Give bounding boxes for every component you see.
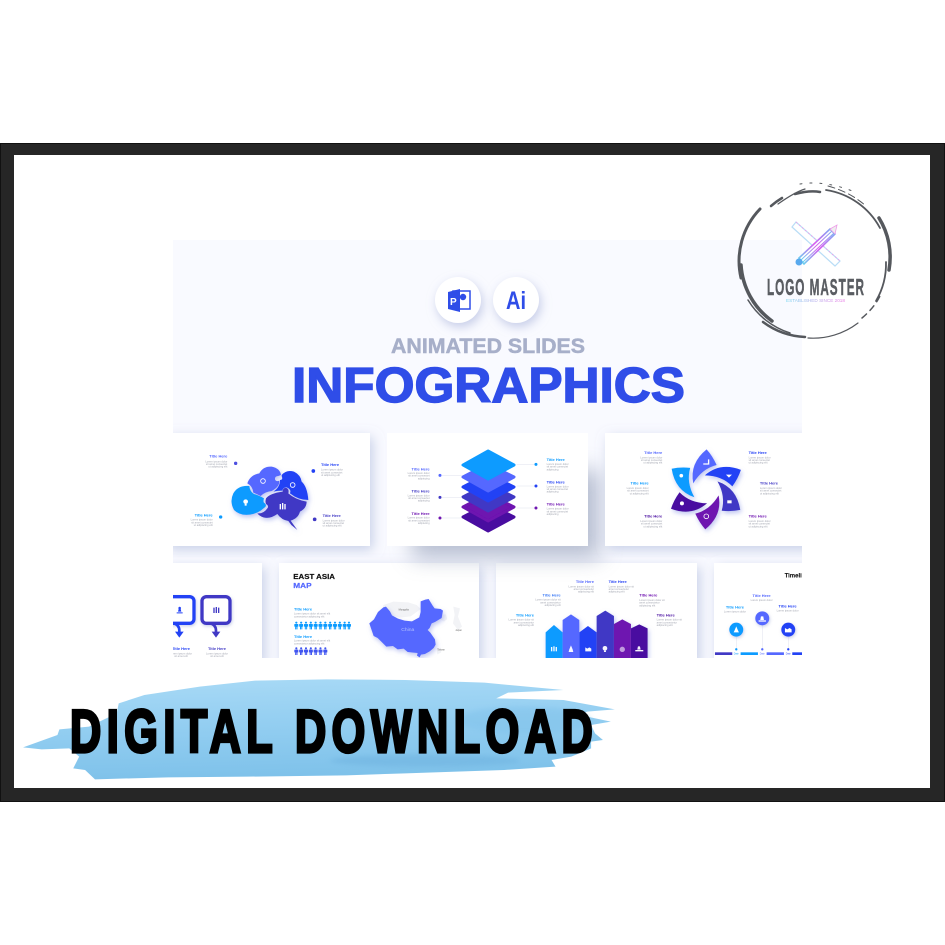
card: flower diagram: Title Here <box>631 481 649 486</box>
card: flower diagram: ut adipiscing elit <box>643 461 663 465</box>
icon: PowerPoint badge <box>435 277 481 323</box>
card: flower diagram: sit amet consectet <box>627 489 649 493</box>
card: East Asia map: Title Here <box>294 634 313 639</box>
card: flower diagram: ut adipiscing elit <box>630 491 649 495</box>
card: arrow bar chart: Lorem ipsum dolor sit <box>569 584 594 588</box>
card: arrow bar chart: Lorem ipsum dolor sit <box>657 618 682 622</box>
card: arrow bar chart: Title Here <box>657 612 675 617</box>
card: brain puzzle: Title Here <box>209 454 228 459</box>
card: flower diagram: Title Here <box>760 481 779 486</box>
slide preview panel <box>173 274 802 658</box>
card: arrow bar chart: amet consectetur <box>657 620 677 624</box>
card: layer stack: Lorem ipsum dolor <box>408 516 430 520</box>
card: timeline: Title Here <box>753 593 771 598</box>
card: brain puzzle: Lorem ipsum dolor <box>321 468 343 472</box>
logo tagline: ESTABLISHED SINCE 2018 <box>786 298 846 303</box>
card: arrow bar chart: amet consectetur <box>514 620 534 624</box>
card: flower diagram: sit amet consectet <box>641 458 663 462</box>
icon: Illustrator badge <box>493 277 539 323</box>
card: timeline: Lorem ipsum dolor <box>751 598 773 602</box>
card: arrow bar chart: amet consectetur <box>609 587 629 591</box>
card: flower diagram: ut adipiscing elit <box>749 461 768 465</box>
card: timeline: Date <box>734 653 739 656</box>
card: arrow bar chart: adipiscing elit <box>639 603 655 607</box>
card: layer stack: Title Here <box>547 457 565 462</box>
card: timeline: Date <box>786 653 791 656</box>
card: speech boxes <box>160 563 262 663</box>
card: East Asia map: Lorem ipsum dolor sit amet elit <box>294 611 330 615</box>
card: layer stack: Title Here <box>547 479 565 484</box>
card: East Asia map: EAST ASIA <box>293 572 336 581</box>
card: speech boxes: Lorem ipsum dolor <box>206 651 228 655</box>
card: arrow bar chart: adipiscing elit <box>657 623 673 627</box>
card: layer stack: sit amet consectet <box>408 474 430 478</box>
logo badge <box>739 183 890 338</box>
card: brain puzzle: sit amet consectet <box>323 521 344 525</box>
logo ring <box>739 183 890 338</box>
card: layer stack: adipiscing <box>418 521 430 525</box>
card: brain puzzle: Title Here <box>195 512 213 517</box>
shadow under stack card <box>412 470 600 558</box>
card: arrow bar chart: Lorem ipsum dolor sit <box>509 618 534 622</box>
card: layer stack: adipiscing <box>547 490 559 494</box>
card: arrow bar chart: Title Here <box>609 579 627 584</box>
card: brain puzzle: sit amet consectet <box>206 462 228 466</box>
card: brain puzzle: ut adipiscing elit <box>321 473 340 477</box>
card: arrow bar chart: Lorem ipsum dolor sit <box>609 584 634 588</box>
map: neighbours <box>383 602 462 654</box>
card: speech boxes: Title Here <box>172 646 191 651</box>
people row: blue <box>294 622 351 629</box>
card: arrow bar chart: adipiscing elit <box>518 623 534 627</box>
subtitle: ANIMATED SLIDES <box>391 335 585 358</box>
card: brain puzzle: Lorem ipsum dolor <box>191 518 213 522</box>
card: arrow bar chart: adipiscing elit <box>609 590 625 594</box>
card: flower diagram: ut adipiscing elit <box>749 524 768 528</box>
card: brain puzzle: sit amet consectet <box>321 470 343 474</box>
logo icon: ruler and pencil <box>792 222 840 266</box>
brain lobe: light blue <box>231 486 266 515</box>
card: layer stack: Lorem ipsum dolor <box>547 507 569 511</box>
card: flower diagram: Title Here <box>644 514 663 519</box>
card: speech boxes: sit amet elit <box>210 654 224 658</box>
card: flower diagram: ut adipiscing elit <box>643 524 663 528</box>
card: speech boxes: Title Here <box>208 646 227 651</box>
card: timeline: Date <box>760 653 765 656</box>
watercolor brush <box>23 679 615 779</box>
card: flower diagram: Lorem ipsum dolor <box>749 519 771 523</box>
card: East Asia map: Mongolia <box>399 608 409 611</box>
card: flower diagram: Title Here <box>749 450 767 455</box>
card: layer stack: adipiscing <box>547 512 559 516</box>
card: arrow bar chart: amet consectetur <box>540 600 561 604</box>
card: flower diagram: sit amet consectet <box>749 458 770 462</box>
card: timeline: Title Here <box>726 605 745 610</box>
brain lobe: blue <box>273 471 308 500</box>
card: brain puzzle <box>165 433 370 546</box>
row 2 cards <box>160 563 824 663</box>
card: arrow bar chart: Title Here <box>543 592 561 597</box>
card: flower diagram: Lorem ipsum dolor <box>640 455 662 459</box>
card: flower diagram: Lorem ipsum dolor <box>640 519 662 523</box>
flower petals <box>665 449 747 529</box>
row 1 cards <box>165 433 825 546</box>
card: layer stack: Lorem ipsum dolor <box>408 471 430 475</box>
picture frame <box>0 143 945 802</box>
card: brain puzzle: ut adipiscing elit <box>323 524 342 528</box>
card: arrow bar chart: amet consectetur <box>639 601 660 605</box>
card: layer stack: Lorem ipsum dolor <box>408 493 430 497</box>
logo wordmark: LOGO MASTER <box>767 273 864 300</box>
card: brain puzzle: ut adipiscing elit <box>208 465 228 469</box>
card: East Asia map: Title Here <box>294 607 313 612</box>
card: speech boxes: sit amet elit <box>174 654 188 658</box>
chart bars <box>546 611 648 658</box>
card: layer stack: Title Here <box>412 489 430 494</box>
card: flower diagram: Title Here <box>644 450 663 455</box>
card: arrow bar chart: Lorem ipsum dolor sit <box>535 598 561 602</box>
card: flower diagram: sit amet consectet <box>641 522 663 526</box>
card: arrow bar chart: adipiscing elit <box>578 590 594 594</box>
banner text: DIGITAL DOWNLOAD <box>70 699 593 766</box>
card: arrow bar chart: Title Here <box>576 579 595 584</box>
card: arrow bar chart: adipiscing elit <box>545 603 561 607</box>
card: brain puzzle: Lorem ipsum dolor <box>205 459 227 463</box>
card: arrow bar chart: Title Here <box>516 612 535 617</box>
card: timeline: Title Here <box>779 604 797 609</box>
card: brain puzzle: Title Here <box>323 513 342 518</box>
card: timeline: Lorem ipsum dolor <box>777 609 799 613</box>
card: brain puzzle: sit amet consectet <box>191 520 213 524</box>
card: East Asia map <box>279 563 479 663</box>
card: layer stack: Title Here <box>412 466 430 471</box>
icon: PowerPoint badge: P <box>450 297 457 308</box>
card: layer stack: adipiscing <box>418 476 430 480</box>
card: layer stack: sit amet consectet <box>547 465 568 469</box>
card: brain puzzle: ut adipiscing elit <box>194 523 213 527</box>
card: layer stack: Title Here <box>412 511 430 516</box>
stacked layers <box>463 451 514 531</box>
card: arrow bar chart: Lorem ipsum dolor sit <box>639 598 665 602</box>
card: speech boxes: Lorem ipsum dolor <box>170 651 192 655</box>
card: flower diagram: Lorem ipsum dolor <box>749 455 771 459</box>
card: flower diagram: Title Here <box>749 514 767 519</box>
card: layer stack <box>394 450 588 546</box>
card: layer stack: adipiscing <box>418 499 430 503</box>
card: East Asia map: Taiwan <box>437 649 446 652</box>
main title: INFOGRAPHICS <box>292 359 685 413</box>
card: arrow bar chart <box>496 563 697 663</box>
brain lobe: periwinkle <box>247 467 281 496</box>
card: flower diagram <box>605 433 825 546</box>
card: flower diagram: Lorem ipsum dolor <box>760 486 782 490</box>
card: layer stack: Lorem ipsum dolor <box>547 462 569 466</box>
card: layer stack: sit amet consectet <box>547 487 568 491</box>
card: East Asia map: consectetur adipiscing elit <box>294 614 325 618</box>
icon: Illustrator badge: Ai <box>506 287 526 315</box>
card: timeline: Timeline <box>785 573 809 579</box>
card: layer stack: sit amet consectet <box>408 496 430 500</box>
card: flower diagram: sit amet consectet <box>749 522 770 526</box>
card: flower diagram: sit amet consectet <box>760 489 782 493</box>
card: East Asia map: consectetur adipiscing elit <box>294 642 325 646</box>
card: layer stack: adipiscing <box>547 467 559 471</box>
card: arrow bar chart: amet consectetur <box>574 587 594 591</box>
card: brain puzzle: Title Here <box>321 462 340 467</box>
card: East Asia map: Lorem ipsum dolor sit amet elit <box>294 639 330 643</box>
card: East Asia map: China <box>401 627 415 633</box>
card: flower diagram: ut adipiscing elit <box>760 491 779 495</box>
map: China <box>369 599 443 657</box>
card: East Asia map: MAP <box>293 581 312 590</box>
card: layer stack: sit amet consectet <box>547 509 568 513</box>
card: timeline: Lorem ipsum dolor <box>724 610 746 614</box>
card: layer stack: Title Here <box>547 502 565 507</box>
card: layer stack: sit amet consectet <box>408 518 430 522</box>
people row: indigo <box>294 647 327 655</box>
brain lobe: dark indigo <box>257 488 307 530</box>
card: flower diagram: Lorem ipsum dolor <box>627 486 649 490</box>
card: timeline <box>712 562 802 658</box>
card: brain puzzle: Lorem ipsum dolor <box>323 518 345 522</box>
card: arrow bar chart: Title Here <box>639 593 658 598</box>
card: East Asia map: Japan <box>455 629 463 632</box>
card: layer stack: Lorem ipsum dolor <box>547 484 569 488</box>
